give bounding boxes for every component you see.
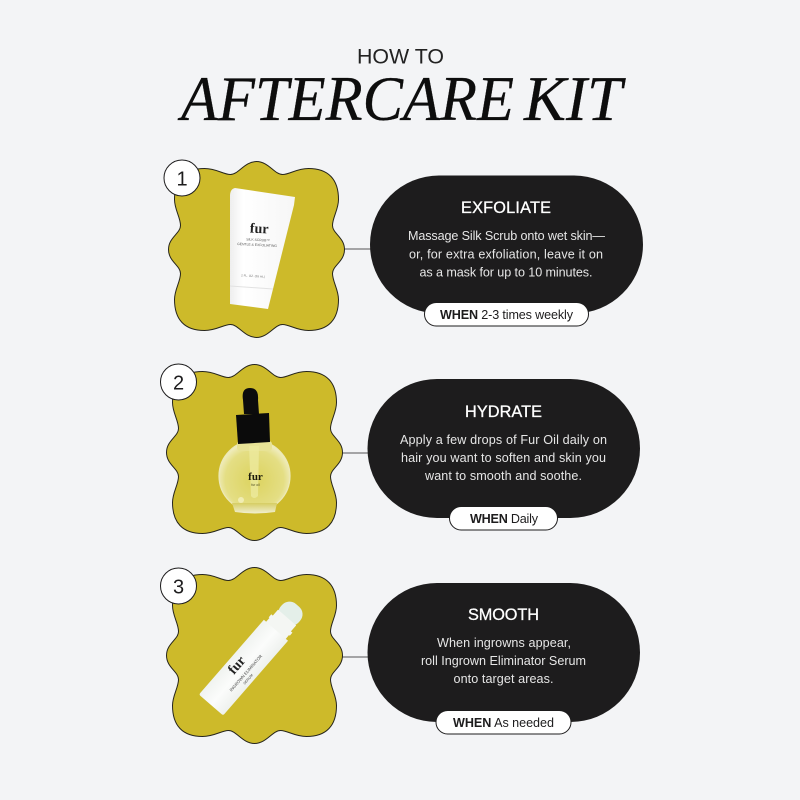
number badge 3 — [160, 568, 196, 604]
step 3: smooth — [160, 568, 640, 744]
when badge 2 — [450, 506, 558, 530]
text panel 3 — [368, 583, 640, 722]
step description 3: When ingrowns appear, — [437, 636, 571, 650]
number badge 3: 3 — [173, 576, 184, 598]
wavy panel 3 — [166, 568, 342, 744]
product: silk scrub tube — [230, 188, 295, 309]
number badge 2 — [160, 364, 196, 400]
product: ingrown eliminator roller — [199, 595, 310, 715]
step 1: exfoliate — [164, 160, 643, 338]
connector line 1 — [343, 248, 372, 250]
connector line 2 — [341, 452, 370, 454]
roller label: INGROWN ELIMINATOR — [229, 654, 263, 692]
bottle brand: fur — [248, 471, 263, 483]
number badge 1: 1 — [176, 168, 188, 190]
step description 2 — [400, 433, 607, 483]
step description 3: onto target areas. — [454, 672, 554, 686]
heading: how to: HOW TO — [357, 44, 444, 68]
step description 2: want to smooth and soothe. — [424, 469, 582, 483]
product: fur oil bottle — [219, 388, 290, 514]
when badge 1: WHEN 2-3 times weekly — [440, 308, 574, 322]
step description 3 — [421, 636, 586, 686]
roller brand: fur — [226, 654, 249, 678]
connector line 3 — [341, 656, 370, 658]
text panel 1 — [370, 176, 643, 314]
tube sublabel: GENTLE & EXFOLIATING — [237, 242, 277, 248]
step 2: hydrate — [160, 364, 640, 540]
step heading 2: HYDRATE — [465, 403, 542, 421]
step description 2: hair you want to soften and skin you — [401, 451, 606, 465]
step description 1: Massage Silk Scrub onto wet skin— — [408, 229, 605, 243]
number badge 1 — [164, 160, 200, 196]
text panel 2 — [368, 379, 640, 518]
number badge 2: 2 — [173, 372, 184, 394]
tube brand: fur — [249, 222, 269, 237]
title: aftercare kit: KIT — [523, 64, 626, 134]
step description 2: Apply a few drops of Fur Oil daily on — [400, 433, 607, 447]
step heading 3: SMOOTH — [468, 606, 539, 624]
wavy panel 2 — [166, 364, 342, 540]
tube volume: 2 FL. OZ. (59 mL) — [241, 273, 265, 279]
tube label: SILK SCRUB™ — [246, 237, 270, 243]
roller sublabel: SERUM — [243, 673, 254, 685]
title: aftercare kit: AFTERCARE — [177, 64, 514, 134]
wavy panel 1 — [168, 162, 344, 338]
step heading 1: EXFOLIATE — [461, 199, 551, 217]
when badge 1 — [424, 302, 588, 326]
step description 1: or, for extra exfoliation, leave it on — [409, 248, 603, 262]
when badge 3 — [436, 710, 571, 734]
step description 1 — [408, 229, 605, 280]
bottle label: fur oil — [251, 483, 260, 487]
step description 1: as a mask for up to 10 minutes. — [420, 266, 592, 280]
when badge 2: WHEN Daily — [470, 512, 539, 526]
when badge 3: WHEN As needed — [453, 716, 554, 730]
step description 3: roll Ingrown Eliminator Serum — [421, 654, 586, 668]
